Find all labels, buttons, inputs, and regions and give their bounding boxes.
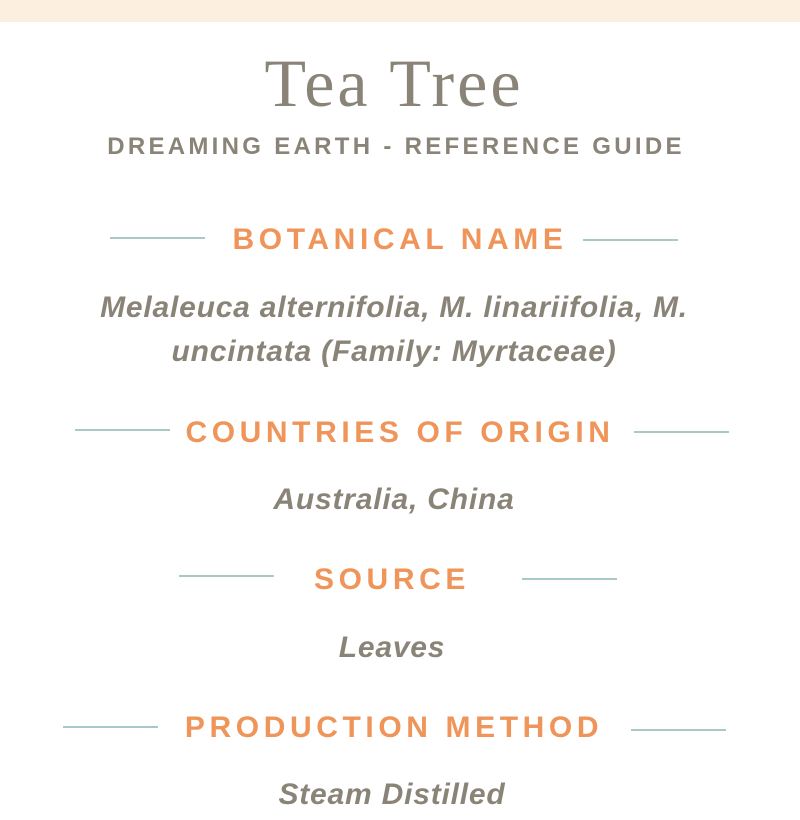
- text: botanical name: [100, 291, 688, 368]
- heading: source: SOURCE: [314, 563, 470, 596]
- text: production method: Steam Distilled: [278, 778, 506, 811]
- section: source: [179, 563, 617, 664]
- top band: [0, 0, 800, 22]
- section: production method: [63, 711, 726, 811]
- section: countries of origin: [75, 416, 729, 516]
- heading: botanical name: BOTANICAL NAME: [233, 223, 567, 256]
- section: botanical name: [100, 223, 688, 368]
- text: botanical name: Melaleuca alternifolia, M. linariifolia, M.: [100, 291, 688, 324]
- heading: countries of origin: COUNTRIES OF ORIGIN: [185, 416, 615, 449]
- title: Tea Tree: [264, 45, 524, 121]
- text: countries: Australia, China: [273, 483, 515, 516]
- heading: production method: PRODUCTION METHOD: [185, 711, 603, 744]
- text: source: Leaves: [339, 631, 445, 664]
- subtitle: DREAMING EARTH - REFERENCE GUIDE: [107, 133, 685, 160]
- text: botanical name: uncintata (Family: Myrtaceae): [172, 335, 616, 368]
